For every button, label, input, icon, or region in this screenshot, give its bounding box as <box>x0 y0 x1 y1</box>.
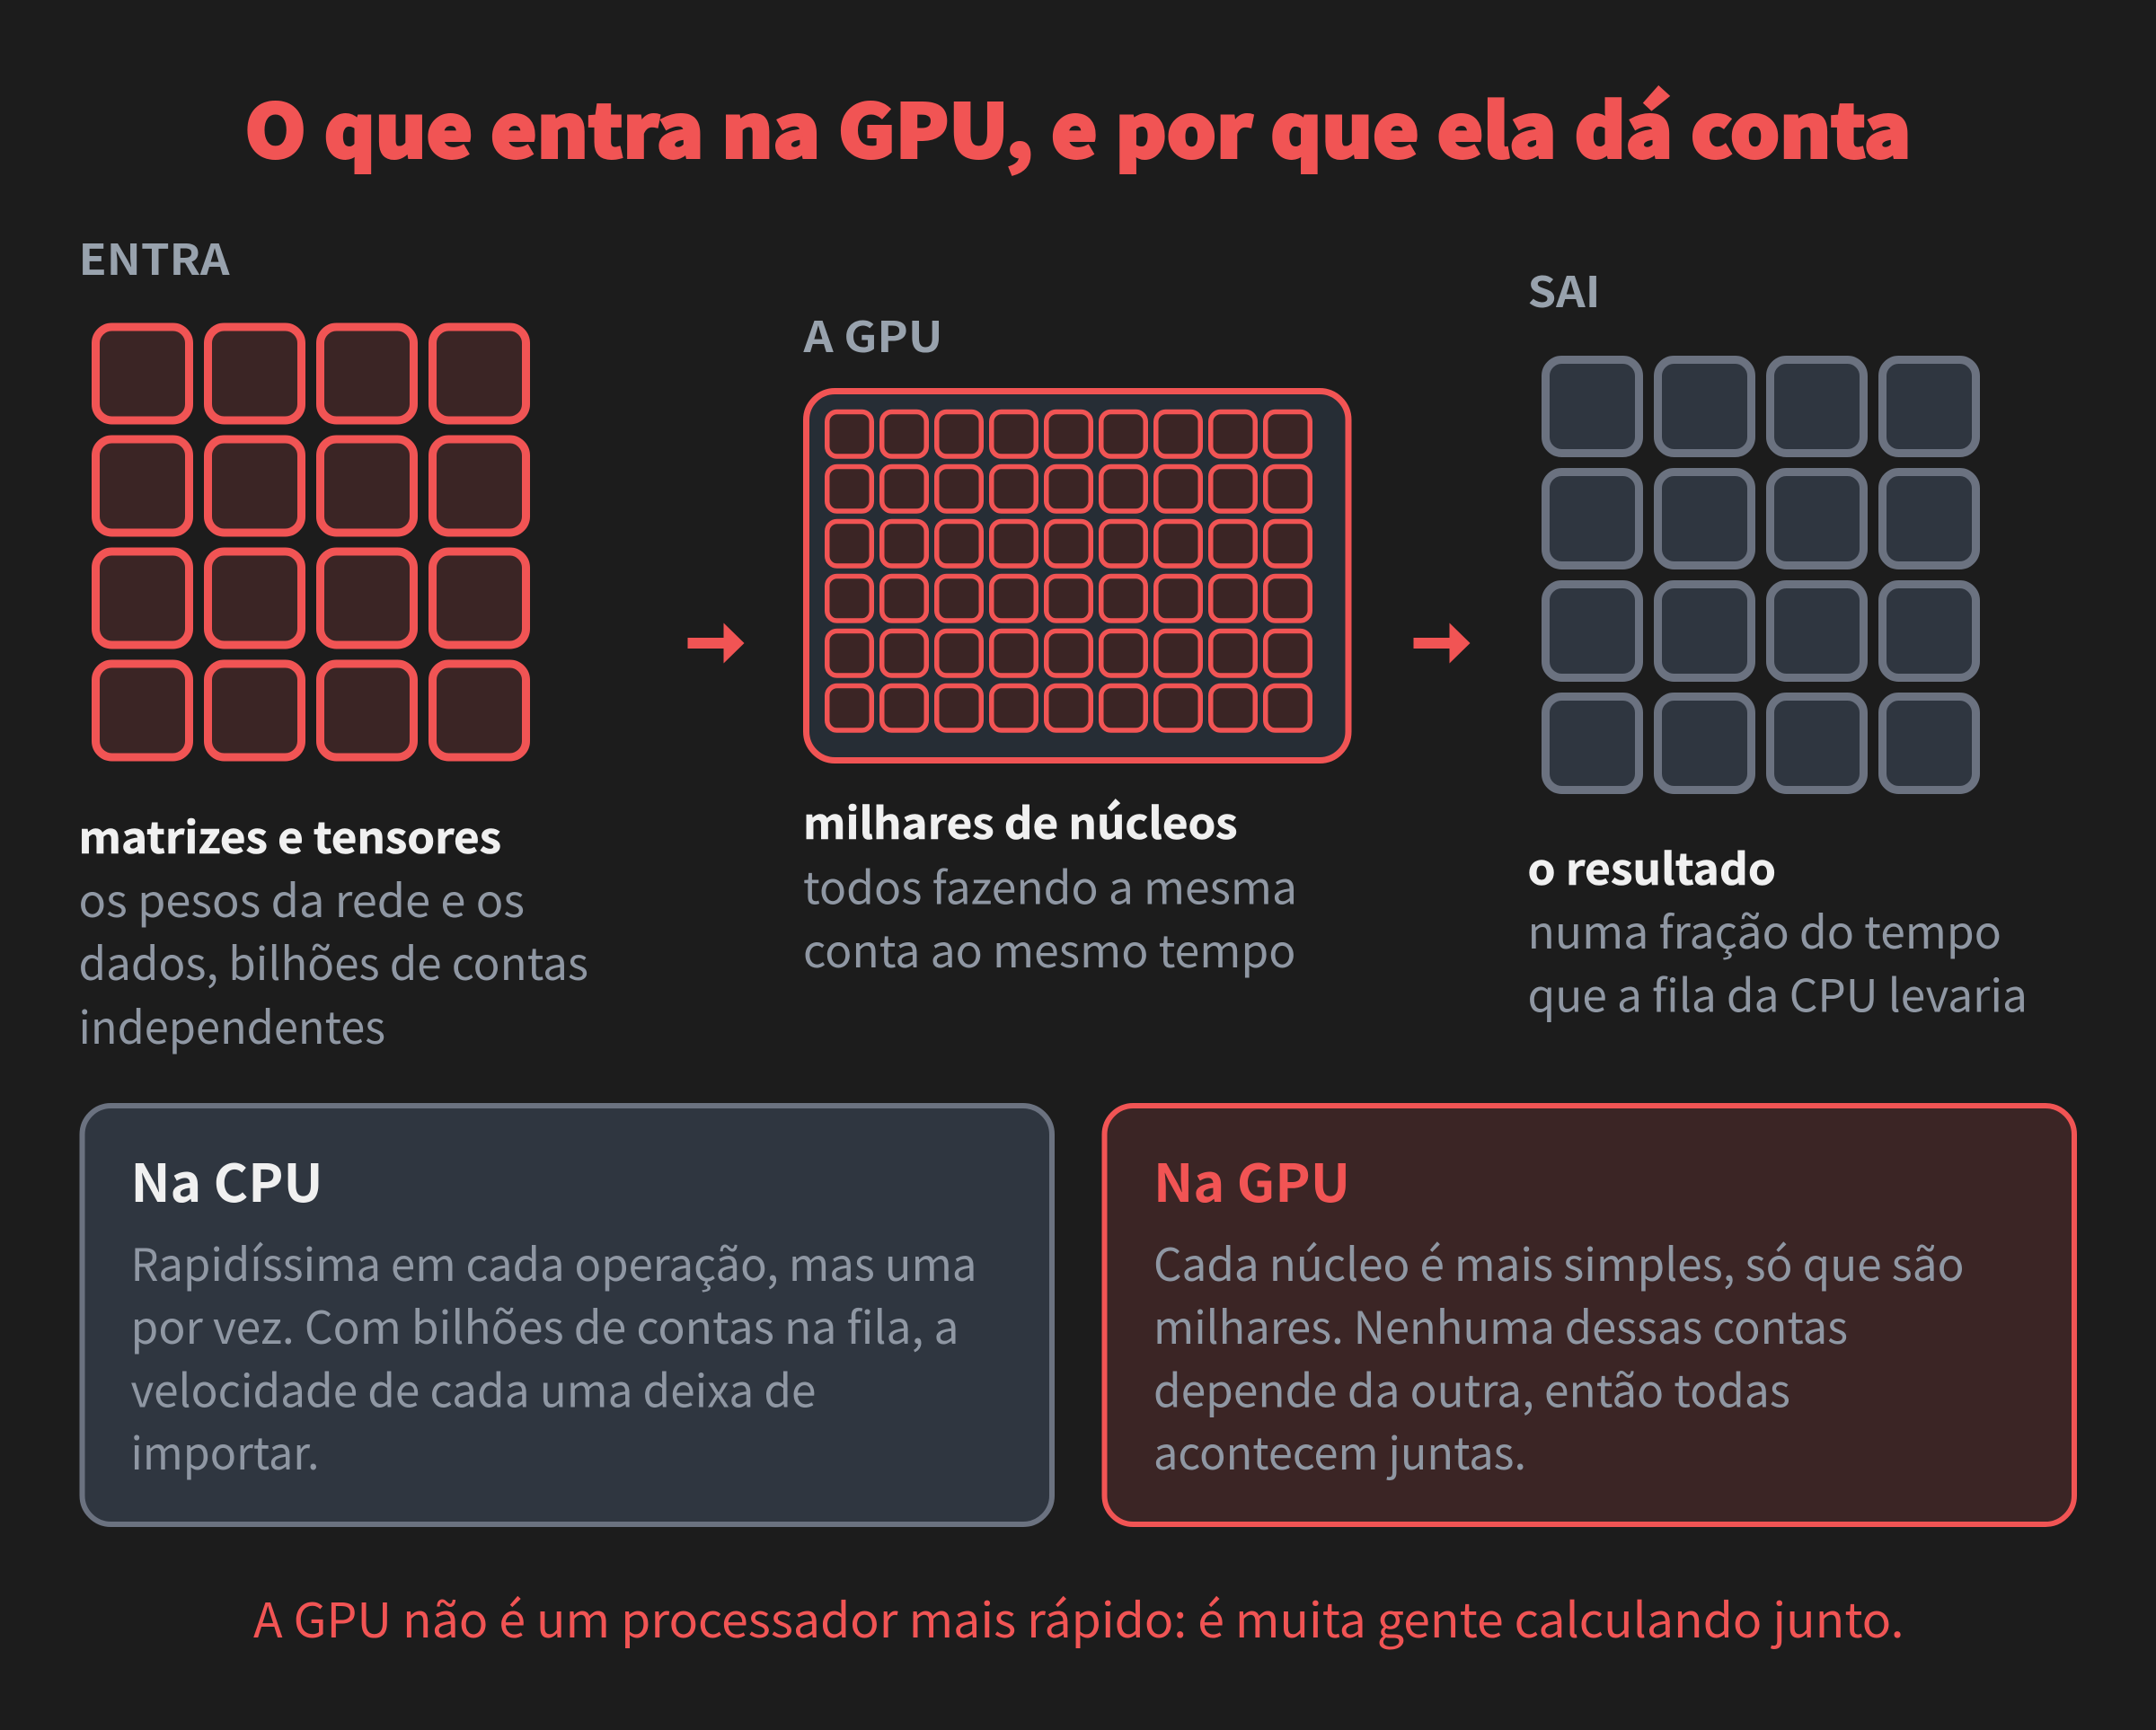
label: entra: ENTRA <box>79 225 230 287</box>
description: entra: dados, bilhões de contas <box>79 929 588 993</box>
arrow: entra to GPU <box>688 623 744 663</box>
description: sai <box>1527 897 2028 1026</box>
description: sai: numa fração do tempo <box>1527 897 2001 962</box>
description: a GPU: conta ao mesmo tempo <box>803 916 1295 981</box>
panel: na CPU <box>83 1106 1052 1524</box>
chip with cores <box>807 392 1348 760</box>
description: sai: que a fila da CPU levaria <box>1527 961 2028 1026</box>
heading: milhares de núcleos: milhares de núcleos <box>803 789 1238 852</box>
body: na CPU: importar. <box>131 1418 320 1483</box>
footer takeaway: A GPU não é um processador mais rápido: é muita gente calculando junto. <box>253 1584 1904 1652</box>
heading: na CPU: Na CPU <box>131 1142 323 1217</box>
body: na GPU: depende da outra, então todas <box>1153 1356 1790 1421</box>
body: na CPU: Rapidíssima em cada operação, mas uma <box>131 1230 977 1294</box>
label: sai: SAI <box>1527 258 1601 320</box>
body: na CPU <box>131 1230 977 1483</box>
panel: na GPU <box>1105 1106 2074 1524</box>
grid: result <box>1545 359 1976 790</box>
body: na CPU: por vez. Com bilhões de contas na fila, a <box>131 1293 959 1357</box>
body: na GPU: acontecem juntas. <box>1153 1418 1526 1483</box>
body: na GPU <box>1153 1230 1964 1483</box>
panel: entra <box>79 225 588 1057</box>
grid: matrices <box>95 327 526 757</box>
body: na CPU: velocidade de cada uma deixa de <box>131 1356 816 1421</box>
description: a GPU: todos fazendo a mesma <box>803 853 1297 918</box>
label: a GPU: A GPU <box>802 303 943 365</box>
description: a GPU <box>803 853 1297 981</box>
description: entra: os pesos da rede e os <box>79 866 525 931</box>
arrow: GPU to sai <box>1414 623 1470 663</box>
description: entra <box>79 866 588 1057</box>
heading: na GPU: Na GPU <box>1153 1142 1350 1217</box>
panel: a GPU <box>802 303 1348 981</box>
heading: o resultado: o resultado <box>1527 834 1776 897</box>
title: O que entra na GPU, e por que ela dá conta <box>244 72 1912 180</box>
description: entra: independentes <box>79 993 385 1057</box>
body: na GPU: Cada núcleo é mais simples, só que são <box>1153 1230 1964 1294</box>
heading: matrizes e tensores: matrizes e tensores <box>79 803 501 866</box>
panel: sai <box>1527 258 2028 1026</box>
body: na GPU: milhares. Nenhuma dessas contas <box>1153 1293 1848 1357</box>
